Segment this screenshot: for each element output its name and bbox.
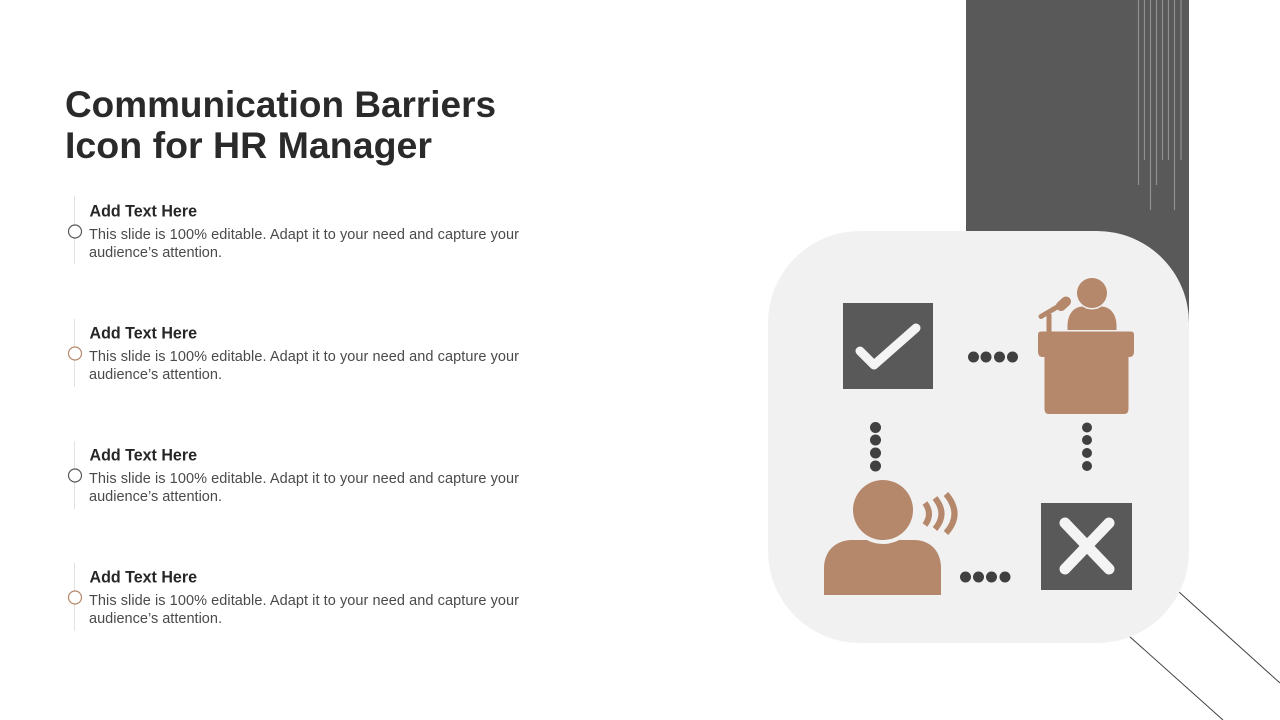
dotted connector: left [870, 422, 881, 472]
list item 4: audience’s attention. [89, 611, 222, 627]
icon: speaking person [824, 480, 954, 595]
rounded light panel [768, 231, 1189, 643]
dotted connector: top [968, 352, 1018, 362]
list item 4: Add Text Here [90, 568, 197, 586]
list item 4 [68, 563, 519, 631]
list item 4: This slide is 100% editable. Adapt it to your need and capture your [89, 593, 519, 609]
dark background panel [966, 0, 1189, 330]
list item 3: audience’s attention. [89, 489, 222, 505]
list item 2 [68, 319, 519, 387]
list item 3 [68, 441, 519, 509]
list item 1: This slide is 100% editable. Adapt it to your need and capture your [89, 227, 519, 243]
list item 3: Add Text Here [90, 446, 197, 464]
list item 2: Add Text Here [90, 324, 197, 342]
title [65, 84, 496, 166]
list item 1: Add Text Here [90, 202, 197, 220]
list item 2: This slide is 100% editable. Adapt it to your need and capture your [89, 349, 519, 365]
list item 2: audience’s attention. [89, 367, 222, 383]
title: Icon for HR Manager [65, 125, 432, 166]
title: Communication Barriers [65, 84, 496, 125]
list item 3: This slide is 100% editable. Adapt it to your need and capture your [89, 471, 519, 487]
icon: speaker at podium [1038, 278, 1134, 414]
icon: check box [843, 303, 933, 389]
list item 1: audience’s attention. [89, 245, 222, 261]
dotted connector: bottom [960, 572, 1010, 582]
icon: cross box [1041, 503, 1132, 590]
dotted connector: right [1082, 422, 1092, 471]
diagonal lines [1129, 592, 1280, 720]
list item 1 [68, 196, 519, 264]
